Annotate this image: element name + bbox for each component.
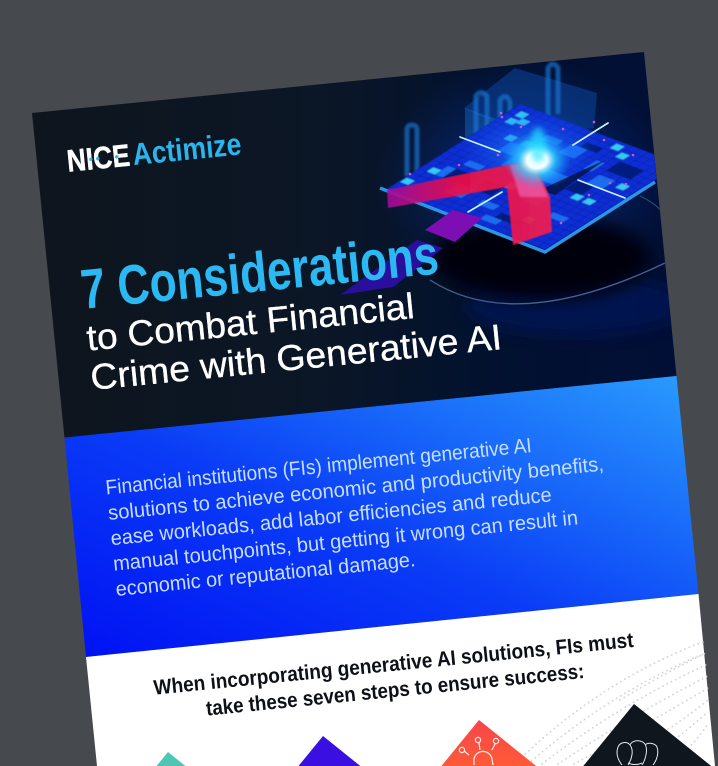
purple shape behind title (340, 240, 443, 295)
text block: introduction: manual touchpoints, but getting it wrong can result in (112, 506, 579, 576)
logo: Actimize: Actimize (131, 126, 243, 172)
marker: teal diamond (156, 752, 185, 766)
subtitle: Crime with Generative AI (89, 316, 504, 398)
panel: blue introduction (64, 376, 698, 657)
platform grid (385, 104, 680, 250)
text block: introduction: Financial institutions (FIs) implement generative AI (104, 434, 533, 499)
platform edge (380, 182, 655, 252)
text block: introduction: economic or reputational damage. (115, 548, 416, 601)
platform light lines (460, 123, 625, 212)
heading: seven steps (153, 629, 637, 726)
panel: white steps section (86, 594, 715, 766)
title (78, 217, 504, 398)
illustration: glowing data platform (340, 60, 685, 335)
heading: seven steps: When incorporating generative AI solutions, FIs must (153, 629, 634, 700)
text block: introduction: solutions to achieve economic and productivity benefits, (107, 453, 605, 525)
icon: network virus (459, 737, 499, 765)
purple tile (425, 210, 482, 242)
dotted wave pattern (515, 640, 708, 764)
marker: purple diamond (298, 736, 360, 766)
text block: introduction: ease workloads, add labor efficiencies and reduce (110, 483, 553, 550)
platform brightness (472, 114, 594, 175)
icon: people (617, 741, 658, 765)
text block: introduction (104, 427, 612, 601)
logo: accent dots (89, 155, 119, 161)
red arrow (387, 160, 552, 245)
logo: NICE: NICE (65, 138, 131, 179)
logo (65, 126, 243, 179)
subtitle (85, 277, 504, 398)
panel: header (32, 52, 676, 438)
heading: seven steps: take these seven steps to ensure success: (205, 660, 585, 721)
subtitle: to Combat Financial (85, 285, 416, 359)
step markers (156, 704, 711, 766)
title: 7 Considerations: 7 Considerations (78, 223, 441, 321)
marker: red diamond (441, 720, 536, 766)
central glow (505, 134, 569, 188)
marker: black diamond (583, 704, 711, 766)
